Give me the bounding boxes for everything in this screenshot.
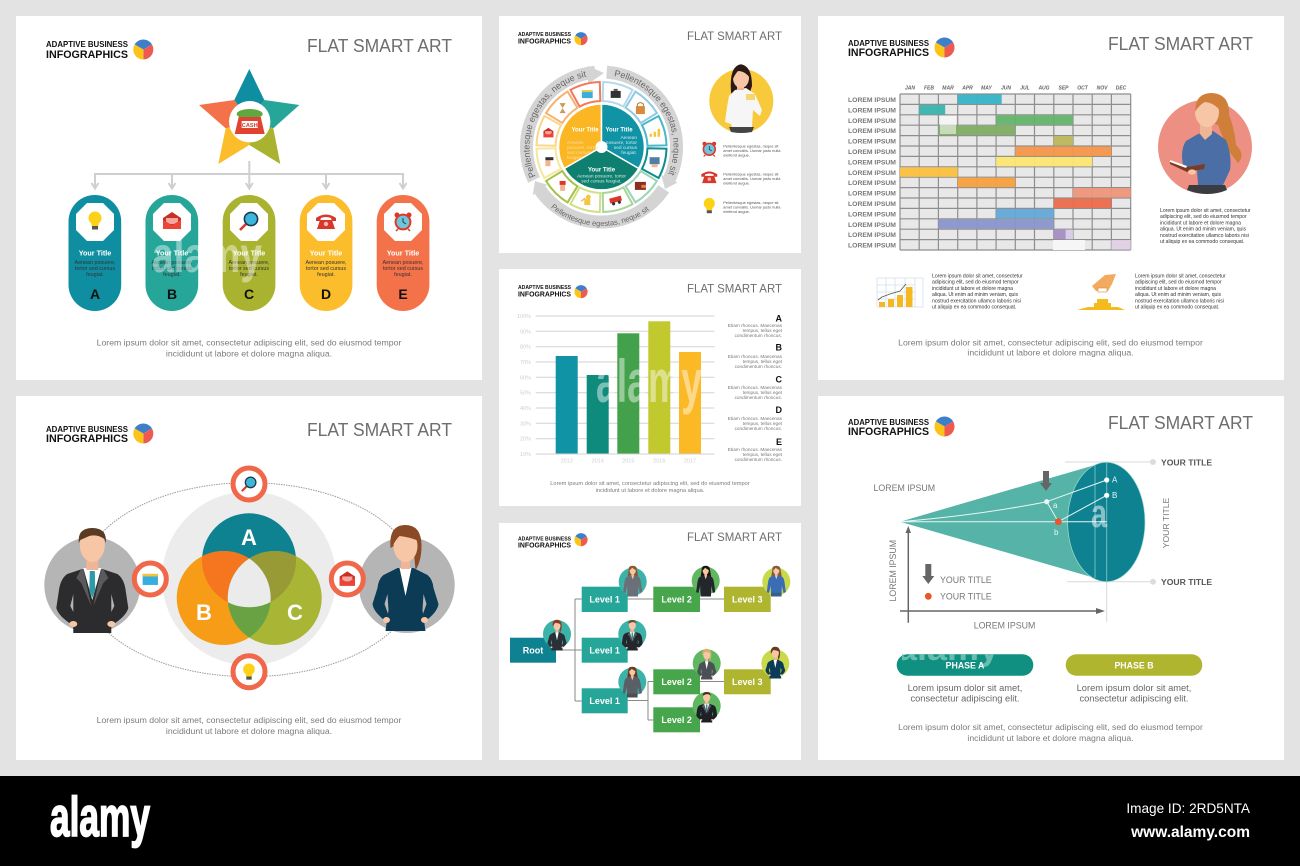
text block: ut aliquip ex ea commodo consequat. [1160,239,1244,245]
text block [932,274,1023,310]
bar chart: 2017 [684,458,696,464]
panel: org tree [499,523,801,760]
logo: INFOGRAPHICS [518,36,571,46]
legend: tempus, tellus eget [743,390,783,395]
bar chart: 2015 [622,458,634,464]
caption [97,338,401,358]
phase text B: Lorem ipsum dolor sit amet, [1077,683,1191,693]
outer arrow ring: Pellentesque egestas, neque sit [524,71,586,178]
phase B [1066,654,1202,676]
person: woman [359,525,455,633]
panel: venn diagram [16,396,482,760]
gantt chart: OCT [1077,86,1089,92]
pie labels: sed cursus [614,145,638,151]
gantt chart: LOREM IPSUM [848,222,896,229]
text block: nostrud exercitation ullamco laboris nisi [1135,298,1224,304]
node: level 1 middle [582,638,628,663]
gantt chart: APR [961,86,973,92]
legend: Etiam rhoncus. Maecenas [728,416,783,421]
cone: B [1112,491,1117,500]
heading: FLAT SMART ART [307,36,452,56]
outer arrow ring: Pellentesque egestas, neque sit [551,204,650,228]
legend: Etiam rhoncus. Maecenas [728,323,783,328]
pill A: Your Title [79,248,111,258]
logo: ADAPTIVE BUSINESS [848,418,930,427]
text block: Lorem ipsum dolor sit amet, consectetur [1135,274,1226,280]
pill C: C [244,286,254,302]
panel: wheel diagram [499,16,801,253]
legend: E [776,437,782,447]
gantt chart: MAY [981,86,993,92]
node: level 1 bottom: Level 1 [589,696,620,706]
legend: condimentum rhoncus. [735,395,782,400]
caption: incididunt ut labore et dolore magna aliqua. [166,726,332,736]
logo: ADAPTIVE BUSINESS [848,39,930,48]
text block: ut aliquip ex ea commodo consequat. [1135,304,1219,310]
url: www.alamy.com [1130,824,1250,841]
legend: condimentum rhoncus. [735,426,782,431]
legend: tempus, tellus eget [743,359,783,364]
brand wordmark: alamy [50,786,150,848]
gantt chart: LOREM IPSUM [848,107,896,114]
node: level 3 top [724,587,771,612]
list: amet convallis. Uomar justo nulla [723,176,781,181]
pill D [300,195,352,311]
legend: B [776,342,782,352]
heading: FLAT SMART ART [307,420,452,440]
pill A: tortor sed cursus [75,266,115,272]
gantt chart: LOREM IPSUM [848,191,896,198]
panel: bar chart [499,269,801,506]
axes: LOREM IPSUM [874,483,935,493]
node: level 1 top: Level 1 [589,594,620,604]
caption: incididunt ut labore et dolore magna aliqua. [166,348,332,358]
image id: Image ID: 2RD5NTA [1126,801,1251,816]
gantt chart: AUG [1037,86,1050,92]
cone [900,462,1145,582]
dotted orbit [81,483,417,677]
gantt chart: LOREM IPSUM [848,201,896,208]
pie labels: sed cursus [567,150,591,156]
down arrow marker [1040,471,1052,491]
legend: condimentum rhoncus. [735,333,782,338]
pill E: Your Title [387,248,419,258]
avatar: level 1 middle [618,620,646,650]
gantt chart: LOREM IPSUM [848,170,896,177]
logo: ADAPTIVE BUSINESS [518,285,571,291]
legend: C [776,374,782,384]
pie labels: Aenean [620,135,637,141]
footer bar [0,776,1300,866]
bar chart: 50% [520,391,531,397]
legend: tempus, tellus eget [743,452,783,457]
heading: FLAT SMART ART [1108,413,1253,433]
logo: INFOGRAPHICS [848,426,929,438]
heading: FLAT SMART ART [1108,34,1253,54]
gantt chart: LOREM IPSUM [848,139,896,146]
logo [518,285,588,298]
text block: incididunt ut labore et dolore magna [1160,220,1241,226]
gantt chart: FEB [924,86,934,92]
gantt chart: JUL [1020,86,1030,92]
phase text A [908,683,1022,704]
gantt chart: LOREM IPSUM [848,97,896,104]
watermark: alamy [152,227,262,283]
venn: C [287,600,303,625]
icon: coin chart [877,278,923,307]
node: level 3 top: Level 3 [732,594,763,604]
pie labels: feugiat. [567,155,583,161]
avatar: level 3 top [762,566,790,596]
pie labels [567,128,638,184]
cone: A [1112,476,1118,484]
legend: condimentum rhoncus. [735,457,782,462]
logo: INFOGRAPHICS [518,540,571,550]
pill D: tortor sed cursus [306,266,346,272]
chart legend [922,564,992,602]
pill C: Your Title [233,248,265,258]
gantt chart: LOREM IPSUM [848,232,896,239]
heading: FLAT SMART ART [687,530,783,544]
bar chart: 60% [520,375,531,381]
gantt chart: NOV [1097,86,1108,92]
phase text B: consectetur adipiscing elit. [1079,694,1189,704]
chart legend: YOUR TITLE [940,592,992,602]
logo [46,424,153,445]
text block: adipiscing elit, sed do eiusmod tempor [932,280,1019,286]
legend: condimentum rhoncus. [735,364,782,369]
avatar: level 2 middle [693,649,721,679]
pill A [68,195,121,311]
axes: LOREM IPSUM [974,620,1035,630]
pill A: A [90,286,100,302]
caption: Lorem ipsum dolor sit amet, consectetur adipiscing elit, sed do eiusmod tempor [97,338,401,348]
text block: nostrud exercitation ullamco laboris nisi [932,298,1021,304]
gantt chart: LOREM IPSUM [848,243,896,250]
connector arrows [92,161,406,188]
caption [97,715,401,736]
logo: INFOGRAPHICS [518,290,571,298]
list: eleifend augue. [723,209,750,214]
logo: ADAPTIVE BUSINESS [518,32,571,38]
caption [898,338,1203,358]
gantt chart: LOREM IPSUM [848,118,896,125]
outer arrow ring [520,66,683,228]
text block: nostrud exercitation ullamco laboris nisi [1160,233,1249,239]
list: amet convallis. Uomar justo nulla [723,204,781,210]
list: Pellentesque egestas, neque sit [723,144,779,148]
icon: envelope ring [331,563,363,595]
list: Pellentesque egestas, neque sit [723,172,779,176]
venn: A [241,525,257,550]
caption: incididunt ut labore et dolore magna aliqua. [967,348,1134,358]
pie centre [559,104,644,190]
pie labels: Your Title [571,128,599,134]
text block: aliqua. Ut enim ad minim veniam, quis [1135,292,1222,298]
pill B: Your Title [156,248,188,258]
logo: INFOGRAPHICS [46,433,128,445]
logo: ADAPTIVE BUSINESS [518,536,571,542]
legend: tempus, tellus eget [743,328,783,333]
list: eleifend augue. [723,152,750,158]
pie labels: Aenean posuere, tortor [577,174,626,180]
node: level 2 middle: Level 2 [661,677,692,687]
node: level 2 bottom: Level 2 [661,715,692,725]
text block: aliqua. Ut enim ad minim veniam, quis [932,292,1019,298]
icon: magnifier ring [233,468,265,500]
text block: aliqua. Ut enim ad minim veniam, quis [1160,227,1247,233]
person: woman in white shirt [709,64,773,133]
bar chart: 2013 [561,458,573,464]
connectors [556,599,724,720]
pill D: Your Title [310,248,342,258]
logo: INFOGRAPHICS [46,49,128,61]
text block: incididunt ut labore et dolore magna [1135,286,1216,292]
person: man [44,528,140,633]
caption: incididunt ut labore et dolore magna aliqua. [596,488,705,494]
gantt chart: DEC [1116,86,1127,92]
venn [177,513,322,645]
node: level 2 bottom [653,707,700,732]
pill B: Aenean posuere, [151,260,193,266]
pie labels: posuere, tortor [567,145,599,151]
bar chart: 2016 [653,458,665,464]
legend: Etiam rhoncus. Maecenas [728,447,783,452]
gantt chart: JUN [1001,86,1011,92]
text block: incididunt ut labore et dolore magna [932,286,1013,292]
caption [550,481,750,494]
pie labels: Your Title [605,128,633,134]
pill D: Aenean posuere, [305,260,347,266]
panel: gantt chart [818,16,1284,380]
logo: ADAPTIVE BUSINESS [46,40,129,49]
caption: Lorem ipsum dolor sit amet, consectetur adipiscing elit, sed do eiusmod tempor [550,481,750,487]
pill E: tortor sed cursus [383,266,423,272]
star [199,69,299,164]
pie labels: sed cursus feugiat. [581,178,622,184]
watermark: alamy [596,348,702,415]
pill D: D [321,286,331,302]
caption: Lorem ipsum dolor sit amet, consectetur adipiscing elit, sed do eiusmod tempor [898,722,1203,732]
right labels: YOUR TITLE [1161,458,1212,468]
phase text B [1077,683,1191,704]
icon: cash bag [235,109,265,134]
pie labels: Your Title [588,168,616,174]
gantt chart: LOREM IPSUM [848,159,896,166]
text block: adipiscing elit, sed do eiusmod tempor [1160,214,1247,220]
pill C [223,195,275,311]
right labels [1150,458,1212,587]
avatar: level 2 top [692,566,720,596]
logo [518,32,588,46]
pill D: feugiat. [317,272,335,278]
legend: Etiam rhoncus. Maecenas [728,354,783,359]
node: root [510,638,556,663]
logo: INFOGRAPHICS [848,47,929,59]
cone: a [1053,501,1058,510]
logo [848,417,954,438]
caption: Lorem ipsum dolor sit amet, consectetur adipiscing elit, sed do eiusmod tempor [97,715,401,725]
pill A: Aenean posuere, [74,260,116,266]
phase A: PHASE A [946,660,985,670]
pill B: feugiat. [163,272,181,278]
pill C: feugiat. [240,272,258,278]
node: level 2 top: Level 2 [661,594,692,604]
bar chart: 80% [520,345,531,351]
axes [874,483,1105,630]
bar chart: 2014 [592,458,604,464]
node: root: Root [523,646,543,656]
right labels: YOUR TITLE [1161,498,1171,548]
gantt chart: SEP [1058,86,1069,92]
guide lines [1065,462,1150,622]
icon: calendar ring [134,563,166,595]
gantt chart: LOREM IPSUM [848,211,896,218]
pill B: B [167,286,177,302]
pill E [377,195,429,311]
node: level 1 middle: Level 1 [589,646,620,656]
outer arrow ring: Pellentesque egestas, neque sit [614,70,678,176]
avatar: level 1 bottom [618,667,646,697]
panel: star org chart [16,16,482,380]
legend: A [776,314,782,324]
node: level 2 middle [653,669,700,694]
pill C: Aenean posuere, [228,260,270,266]
pill E: E [398,286,408,302]
node: level 1 top [582,587,628,612]
list: amet convallis. Uomar justo nulla [723,148,781,153]
icon: bulb ring [233,656,265,688]
text block: Lorem ipsum dolor sit amet, consectetur [932,274,1023,280]
legend [728,314,783,462]
phase B: PHASE B [1114,660,1154,670]
gantt chart: LOREM IPSUM [848,128,896,135]
pill B [146,195,198,311]
legend: Etiam rhoncus. Maecenas [728,385,783,390]
caption: incididunt ut labore et dolore magna aliqua. [967,733,1134,743]
gantt chart: LOREM IPSUM [848,149,896,156]
right labels: YOUR TITLE [1161,577,1212,587]
phase A: alamy [897,630,999,668]
list: Pellentesque egestas, neque sit [723,200,779,205]
logo [848,38,954,59]
phase text A: consectetur adipiscing elit. [910,694,1020,704]
text block: ut aliquip ex ea commodo consequat. [932,304,1016,310]
pill E: Aenean posuere, [382,260,424,266]
chart legend: YOUR TITLE [940,575,992,585]
pie labels: posuere, tortor [606,140,637,146]
bar chart: 90% [520,329,531,335]
phase A [897,630,1033,676]
avatar: root [543,620,571,650]
ring icons [543,89,660,206]
pill C: tortor sed cursus [229,266,269,272]
logo [46,40,153,61]
bar chart: 70% [520,360,531,366]
node: level 2 top [653,587,700,612]
node: level 1 bottom [582,688,628,713]
bar chart: 20% [520,437,531,443]
caption [898,722,1203,743]
node: level 3 bottom: Level 3 [732,677,763,687]
cone: a [1091,492,1108,536]
heading: FLAT SMART ART [687,29,783,43]
gantt chart: JAN [905,86,915,92]
text block: Lorem ipsum dolor sit amet, consectetur [1160,208,1251,214]
node: level 3 bottom [724,669,771,694]
legend: D [776,405,782,415]
cone: b [1054,528,1059,537]
legend: tempus, tellus eget [743,421,783,426]
icon: hand with coins [1077,274,1125,310]
segment ring [535,80,668,214]
list: eleifend augue. [723,180,750,186]
backdrop circle [162,491,336,665]
text block: adipiscing elit, sed do eiusmod tempor [1135,280,1222,286]
venn: B [196,600,212,625]
logo [518,533,588,550]
heading: FLAT SMART ART [687,282,783,296]
pill E: feugiat. [394,272,412,278]
pill A: feugiat. [86,272,104,278]
text block [1135,274,1226,310]
pill B: tortor sed cursus [152,266,192,272]
logo: ADAPTIVE BUSINESS [46,425,129,434]
text block [1160,208,1251,245]
gantt chart: MAR [942,86,954,92]
bar chart: 30% [520,421,531,427]
avatar: level 3 bottom [761,647,789,678]
gantt chart: LOREM IPSUM [848,180,896,187]
pie labels: Aenean [567,140,584,146]
bar chart [517,314,714,464]
bar chart: 100% [517,314,531,320]
bar chart: 10% [520,452,531,458]
axes: LOREM IPSUM [888,540,898,601]
pie labels: feugiat. [621,150,637,156]
gantt chart [848,86,1131,250]
bar chart: 40% [520,406,531,412]
panel: cone diagram [818,396,1284,760]
person: woman with notebook [1158,93,1252,194]
list [701,142,781,214]
avatar: level 1 top [619,566,647,596]
icon: cash bag: CASH [242,123,258,129]
phase text A: Lorem ipsum dolor sit amet, [908,683,1022,693]
avatar: level 2 bottom [693,692,721,722]
caption: Lorem ipsum dolor sit amet, consectetur adipiscing elit, sed do eiusmod tempor [898,338,1203,348]
